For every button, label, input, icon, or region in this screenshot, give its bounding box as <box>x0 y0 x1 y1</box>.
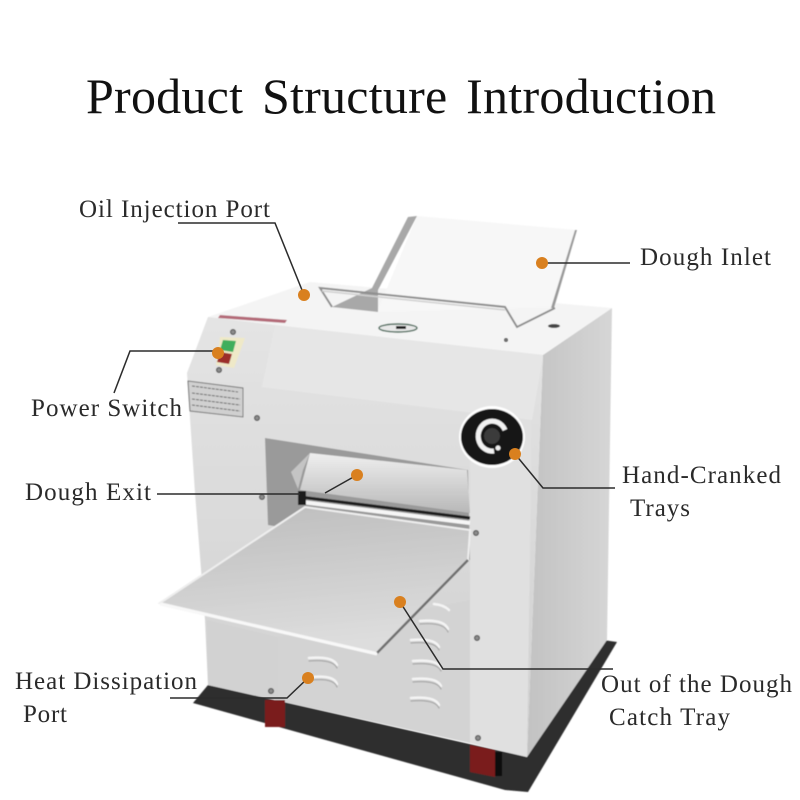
screws <box>216 330 508 740</box>
floor mat <box>193 640 617 792</box>
machine front body <box>187 317 543 757</box>
marker: catch tray <box>394 596 406 608</box>
label: oil injection port: Oil Injection Port <box>79 196 270 223</box>
rating plate <box>188 381 243 417</box>
top vent hole <box>548 324 560 328</box>
power switch <box>216 337 245 368</box>
lower left panel <box>207 620 277 699</box>
label: dough exit: Dough Exit <box>25 479 151 506</box>
leader: heat dissipation <box>170 678 308 698</box>
marker: dough exit <box>351 469 363 481</box>
label: heat dissipation port: Port <box>23 701 67 728</box>
leader: power switch <box>114 351 218 393</box>
machine top surface <box>208 282 612 355</box>
leader: dough exit <box>157 475 357 494</box>
leader: hand-cranked trays <box>515 454 615 488</box>
label: dough inlet: Dough Inlet <box>640 244 771 271</box>
vents <box>309 604 449 708</box>
label: out of the dough catch tray <box>601 671 792 731</box>
feed tray side rail right <box>551 230 577 308</box>
label: hand-cranked trays <box>622 462 782 522</box>
label: hand-cranked trays: Trays <box>630 495 690 522</box>
feed tray side rail left <box>332 216 417 312</box>
top badge <box>379 324 417 332</box>
leader: catch tray <box>400 602 613 669</box>
label: out of the dough catch tray: Catch Tray <box>609 704 730 731</box>
leader: dough inlet <box>542 262 630 264</box>
front upper band <box>262 325 543 420</box>
marker: oil injection port <box>298 289 310 301</box>
lower vented panel <box>277 600 470 743</box>
red top strip <box>218 315 287 323</box>
title: Product Structure Introduction <box>86 68 716 124</box>
machine side panel <box>527 308 612 757</box>
hand crank dial <box>459 406 525 468</box>
wire rail <box>320 288 555 327</box>
label: hand-cranked trays: Hand-Cranked <box>622 462 782 489</box>
machine illustration <box>160 216 617 792</box>
tray front lip <box>160 604 377 654</box>
catch tray <box>160 507 470 653</box>
label: out of the dough catch tray: Out of the Dough <box>601 671 792 698</box>
label: power switch: Power Switch <box>31 395 182 422</box>
marker: power switch <box>212 347 224 359</box>
dough exit roller <box>300 497 470 523</box>
marker: heat dissipation <box>302 672 314 684</box>
right front column <box>470 420 532 757</box>
marker: hand-cranked trays <box>509 448 521 460</box>
top badge center <box>396 326 406 329</box>
roller plate bracket <box>291 453 310 489</box>
roller end cap <box>298 491 306 505</box>
marker: dough inlet <box>536 257 548 269</box>
label: heat dissipation port: Heat Dissipation <box>15 668 198 695</box>
red feet <box>265 700 502 777</box>
feed tray <box>377 216 577 312</box>
door opening <box>265 438 470 560</box>
label: heat dissipation port <box>15 668 198 728</box>
leader: oil injection port <box>178 223 304 295</box>
inner roller plate <box>300 453 470 513</box>
tray edge <box>377 560 468 653</box>
